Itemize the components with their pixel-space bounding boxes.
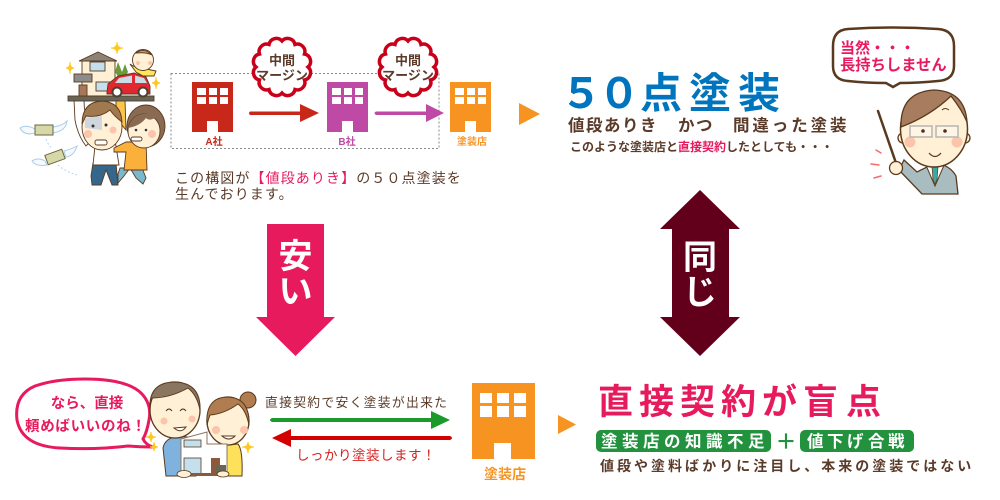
illustration: family burdened by house and car <box>20 42 165 185</box>
margin badge 2: 中間 <box>395 53 421 68</box>
arrow: cheap <box>256 224 335 356</box>
pill: price war <box>800 430 914 452</box>
margin badge 2 <box>379 38 437 96</box>
speech bubble: customer: 頼めばいいのね！ <box>25 417 147 435</box>
building: paint shop: 塗装店 <box>457 135 487 148</box>
building: B社 <box>327 82 368 148</box>
margin badge 2: マージン <box>382 68 434 83</box>
margin badge 1 <box>253 38 311 96</box>
building: A社: A社 <box>205 135 223 148</box>
arrow: cheap: い <box>278 273 312 311</box>
arrow: A社 to B社 <box>249 104 319 122</box>
text: structure explanation <box>175 170 462 202</box>
arrow: B社 to paint shop <box>374 104 444 122</box>
subheading: priced and wrong painting: 値段ありきかつ間違った塗装 <box>568 115 847 135</box>
text: even with direct contract: このような塗装店と直接契約したとしても・・・ <box>570 139 833 154</box>
illustration: happy couple holding house <box>146 382 256 478</box>
building: paint shop large: 塗装店 <box>484 466 526 482</box>
text: not true painting: 値段や塗料ばかりに注目し、本来の塗装ではない <box>600 458 974 474</box>
arrow: cheap: 安 <box>278 238 312 276</box>
text: structure explanation: この構図が【値段ありき】の５０点塗装を <box>175 170 462 186</box>
margin badge 1: 中間 <box>269 53 295 68</box>
pill: price war: 値下げ合戦 <box>807 431 905 451</box>
arrow: same: じ <box>683 274 717 312</box>
text: direct contract cheap: 直接契約で安く塗装が出来た <box>265 395 448 410</box>
building: B社: B社 <box>338 135 356 148</box>
arrow: to conclusion <box>558 415 576 434</box>
heading: blind spot of direct contract: 直接契約が盲点 <box>598 383 881 422</box>
pill: shop's lack of knowledge: 塗装店の知識不足 <box>601 432 765 451</box>
speech bubble: teacher: 長持ちしません <box>840 57 947 74</box>
speech bubble: teacher: 当然・・・ <box>840 39 915 57</box>
building: paint shop large <box>472 383 535 482</box>
illustration: teacher with pointer <box>871 90 970 194</box>
speech bubble: teacher <box>833 28 954 87</box>
speech bubble: customer: なら、直接 <box>51 394 123 412</box>
speech bubble: customer <box>17 379 153 449</box>
margin badge 1: マージン <box>256 68 308 83</box>
arrow: same: 同 <box>683 239 717 277</box>
plus sign: ＋ <box>776 431 796 454</box>
arrow: to result <box>519 103 540 125</box>
heading: 50 point painting: ５０点塗装 <box>560 70 780 117</box>
arrow: shop to customer <box>272 429 452 447</box>
dashed box: intermediaries <box>171 74 439 148</box>
building: A社 <box>192 82 233 148</box>
text: will paint properly: しっかり塗装します！ <box>296 448 436 463</box>
text: structure explanation: 生んでおります。 <box>175 186 294 202</box>
building: paint shop <box>450 82 491 148</box>
arrow: same <box>660 190 740 356</box>
arrow: customer to shop <box>270 411 450 429</box>
